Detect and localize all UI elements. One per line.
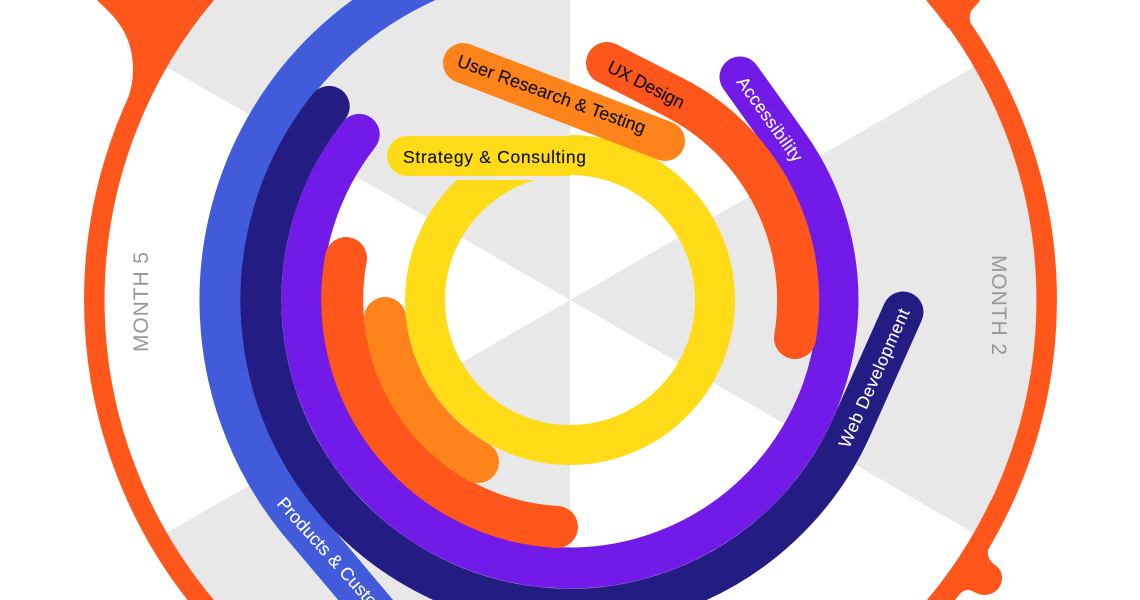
timeline centre line	[569, 0, 571, 136]
yellow ring	[425, 155, 715, 445]
yellow pill	[387, 136, 570, 176]
band: ux design lower arc	[342, 258, 557, 527]
band label: user research: User Research & Testing	[455, 51, 648, 138]
band label: web development: Web Development	[834, 305, 914, 451]
month 5 label: MONTH 5	[130, 252, 153, 352]
month 2 label: MONTH 2	[987, 255, 1010, 355]
marker blob: bottom right	[927, 500, 1013, 600]
band label: accessibility: Accessibility	[733, 73, 807, 166]
band: ux design upper arc	[604, 57, 798, 338]
marker blob: top right	[926, 0, 980, 29]
band: strategy and consulting	[387, 136, 715, 445]
gray month wedges	[154, 0, 1050, 600]
band: user research top pill	[455, 51, 665, 141]
band label: ux design: UX Design	[604, 57, 688, 113]
band: user research lower arc	[385, 318, 478, 462]
band label: strategy: Strategy & Consulting	[403, 147, 586, 167]
marker blob: top left	[97, 0, 214, 130]
